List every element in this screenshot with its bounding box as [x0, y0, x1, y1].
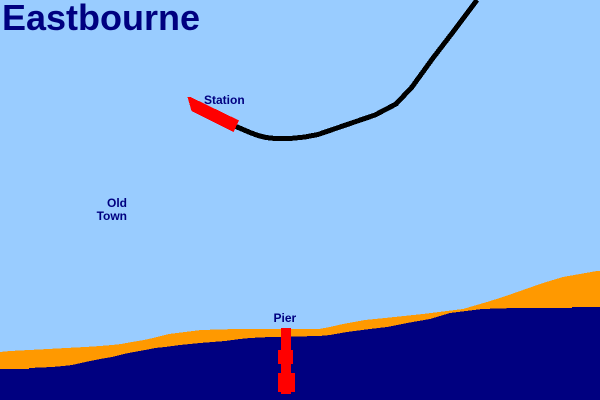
beach: [0, 271, 600, 380]
railway line: [236, 0, 477, 138]
sea: [0, 307, 600, 400]
station: [188, 97, 239, 132]
label: old town: Old: [107, 196, 127, 210]
label: old town: Town: [97, 209, 127, 223]
pier: [278, 328, 295, 394]
label: pier: Pier: [274, 311, 297, 325]
label: station: Station: [204, 93, 245, 107]
